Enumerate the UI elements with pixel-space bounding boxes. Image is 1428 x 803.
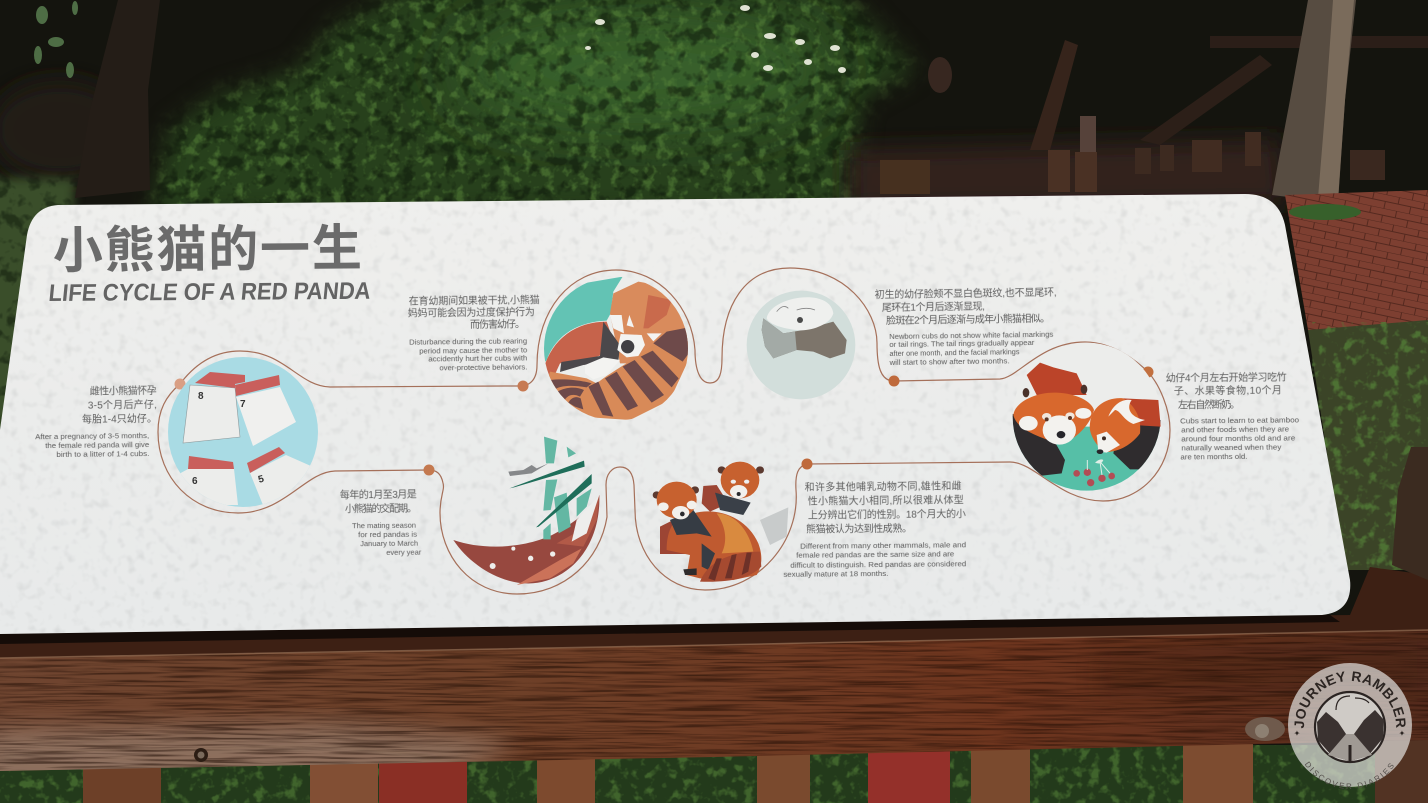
text block: pregnancy: 3-5个月后产仔,	[88, 398, 157, 412]
text block: cub rearing disturbance: 妈妈可能会因为过度保护行为	[408, 305, 535, 320]
page 5: 5	[257, 474, 266, 486]
text block: maturity: difficult to distinguish. Red pandas are considered	[790, 561, 966, 570]
title block	[47, 220, 372, 307]
illustration: calendar pages	[168, 357, 320, 510]
page 6	[188, 456, 234, 487]
text block: newborn cubs: or tail rings. The tail rings gradually appear	[889, 340, 1035, 349]
teal background	[544, 277, 623, 363]
text block: mating season: for red pandas is	[358, 532, 418, 539]
text block: newborn cubs: Newborn cubs do not show white facial markings	[889, 332, 1054, 341]
text block: weaning: naturally weaned when they	[1181, 445, 1282, 452]
illustration: bamboo in a snowy landscape	[453, 437, 599, 585]
front panda	[653, 482, 761, 582]
mother body	[1012, 413, 1065, 477]
page 6: 6	[192, 476, 198, 487]
chinese title: 小熊猫的一生	[53, 220, 362, 279]
badge lettering	[1294, 671, 1406, 789]
timeline connector line	[158, 268, 1170, 594]
groundcover foliage right	[1308, 320, 1428, 570]
page 8: 8	[198, 391, 204, 402]
foliage	[130, 0, 930, 215]
back panda	[702, 462, 764, 515]
text block: weaning: are ten months old.	[1180, 454, 1247, 461]
badge lettering: ✦	[1399, 729, 1406, 738]
page 5	[247, 447, 285, 486]
illustration: mother and cub eating cherries	[1010, 343, 1163, 493]
text block: cub rearing disturbance	[408, 293, 540, 373]
text block: maturity: female red pandas are the same size and are	[796, 551, 954, 560]
text block: mating season: The mating season	[352, 523, 416, 530]
text block: weaning: 左右自然断奶。	[1178, 398, 1240, 411]
text block: newborn cubs: 尾环在1个月后逐渐显现,	[882, 300, 985, 314]
small leaves top left	[34, 1, 78, 78]
text block: pregnancy: 每胎1-4只幼仔。	[82, 412, 157, 426]
timeline dots	[174, 366, 1154, 476]
page 7	[235, 375, 296, 446]
page 8	[183, 372, 245, 443]
text block: cub rearing disturbance: period may cause the mother to	[419, 347, 527, 356]
text block: weaning: 幼仔4个月左右开始学习吃竹	[1166, 371, 1287, 385]
illustration: newborn cub	[747, 291, 855, 399]
earth band and background trees	[850, 140, 1285, 210]
right post	[1392, 447, 1428, 580]
badge lettering: ✦	[1294, 729, 1301, 738]
sign panel	[0, 190, 1360, 640]
cherries	[1073, 459, 1115, 486]
cub head	[1090, 398, 1161, 454]
watermark badge	[1288, 663, 1412, 789]
text block: maturity: 和许多其他哺乳动物不同,雄性和雌	[805, 479, 962, 494]
text block: weaning: 子、水果等食物,10个月	[1174, 384, 1282, 397]
hill crescent	[453, 495, 599, 583]
text block: newborn cubs	[875, 286, 1058, 367]
text block: cub rearing disturbance: 而伤害幼仔。	[470, 317, 525, 331]
teal ground	[1010, 427, 1163, 493]
text block: cub rearing disturbance: over-protective behaviors.	[439, 364, 527, 372]
white flowers	[585, 5, 846, 73]
badge emblem	[1315, 692, 1385, 762]
foreground: pickets and greenery	[0, 738, 1428, 803]
text block: pregnancy	[35, 384, 157, 459]
text block: newborn cubs: 初生的幼仔脸颊不显白色斑纹,也不显尾环,	[875, 286, 1057, 301]
badge lettering: DISCOVER DIARIES	[1304, 762, 1394, 789]
text block: cub rearing disturbance: accidently hurt her cubs with	[428, 355, 527, 363]
text block: weaning	[1166, 370, 1300, 462]
english title: LIFE CYCLE OF A RED PANDA	[47, 278, 372, 307]
text block: weaning: Cubs start to learn to eat bamboo	[1180, 417, 1299, 425]
badge lettering: JOURNEY RAMBLER	[1294, 671, 1406, 728]
text block: maturity: 性小熊猫大小相同,所以很难从体型	[808, 493, 964, 508]
bamboo	[543, 437, 592, 539]
text block: maturity: 熊猫被认为达到性成熟。	[806, 522, 912, 536]
text block: mating season	[340, 488, 422, 557]
text block: weaning: around four months old and are	[1181, 435, 1295, 443]
page 7: 7	[240, 399, 246, 410]
illustration: two adult red pandas	[653, 462, 788, 582]
mother head	[1013, 363, 1094, 445]
left tree trunk	[75, 0, 160, 198]
text block: mating season: January to March	[360, 541, 418, 548]
text block: pregnancy: After a pregnancy of 3-5 months,	[35, 433, 149, 441]
text block: newborn cubs: will start to show after two months.	[888, 358, 1010, 367]
text block: cub rearing disturbance: Disturbance during the cub rearing	[409, 338, 527, 347]
text block: pregnancy: 雌性小熊猫怀孕	[90, 384, 157, 398]
text block: pregnancy: birth to a litter of 1-4 cubs.	[56, 451, 149, 459]
text block: maturity: sexually mature at 18 months.	[783, 571, 888, 579]
text block: cub rearing disturbance: 在育幼期间如果被干扰,小熊猫	[409, 293, 540, 308]
wooden rail	[0, 447, 1428, 790]
right tree trunk	[1272, 0, 1356, 203]
text block: mating season: 每年的1月至3月是	[340, 488, 417, 501]
text block: pregnancy: the female red panda will give	[45, 442, 149, 450]
background: forest and path	[0, 0, 1428, 570]
tail	[547, 327, 690, 420]
text block: maturity	[783, 479, 967, 579]
text block: weaning: and other foods when they are	[1181, 426, 1289, 434]
head and back	[610, 282, 690, 363]
face, paw and ears	[610, 315, 624, 333]
text block: mating season: 小熊猫的交配期。	[345, 502, 417, 515]
text block: maturity: 上分辨出它们的性别。18个月大的小	[808, 507, 966, 522]
illustration: curled mother red panda	[543, 277, 690, 421]
text block: maturity: Different from many other mammals, male and	[800, 542, 966, 551]
brick path	[1285, 190, 1428, 330]
groundcover foliage left	[0, 173, 79, 430]
text block: newborn cubs: after one month, and the facial markings	[889, 349, 1020, 358]
cub body	[1113, 420, 1162, 469]
text block: newborn cubs: 脸斑在2个月后逐渐与成年小熊猫相似。	[886, 312, 1050, 327]
shadow patch	[760, 507, 788, 545]
text block: mating season: every year	[386, 550, 422, 557]
